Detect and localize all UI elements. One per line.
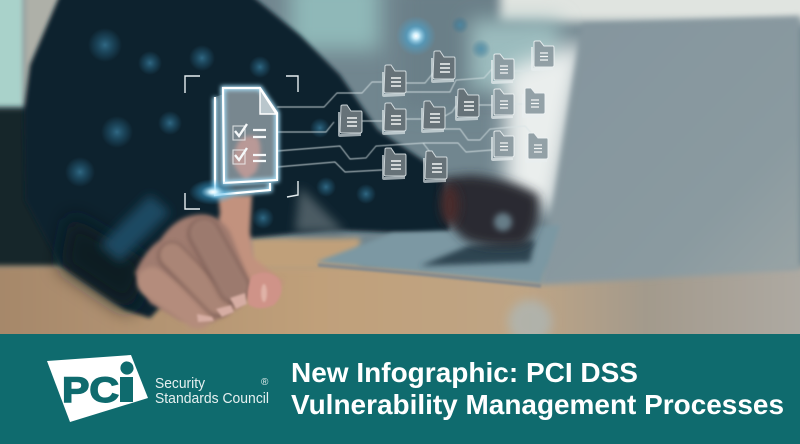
title: Vulnerability Management Processes (291, 389, 784, 420)
logo: PCI Security Standards Council: ® (261, 377, 269, 388)
icon: folder network (338, 41, 554, 183)
fist base (135, 215, 253, 322)
bright window glow (500, 0, 800, 22)
connector lines (277, 60, 535, 172)
finger nails (197, 293, 247, 322)
table (0, 262, 800, 334)
title: New Infographic: PCI DSS (291, 357, 638, 388)
logo mark (47, 355, 148, 422)
index knuckle (204, 234, 234, 288)
title (291, 357, 784, 420)
logo: PCI Security Standards Council (47, 355, 269, 422)
laptop screen (540, 16, 800, 285)
footer band (0, 334, 800, 444)
backdrop (0, 0, 800, 270)
logo: PCI Security Standards Council: PC (62, 371, 119, 410)
shirt (24, 0, 450, 318)
logo: PCI Security Standards Council: Standards Council (155, 391, 269, 407)
hand pointing (135, 195, 285, 322)
middle finger (172, 256, 218, 303)
index finger (216, 193, 268, 276)
icon: fingertip behind document (232, 136, 261, 180)
icon: glowing light flare (398, 18, 434, 54)
ring finger (152, 282, 198, 314)
icon: glowing document (215, 88, 277, 195)
laptop keyboard base (316, 225, 560, 284)
icon: checklist rows (233, 124, 266, 164)
thumb (248, 272, 282, 308)
icon: blue glow at fingertip (189, 179, 237, 205)
far hand on keyboard (443, 175, 539, 247)
logo wordmark: Security (155, 376, 206, 392)
soft shirt dots (65, 16, 512, 231)
icon: focus corner brackets (185, 76, 298, 209)
